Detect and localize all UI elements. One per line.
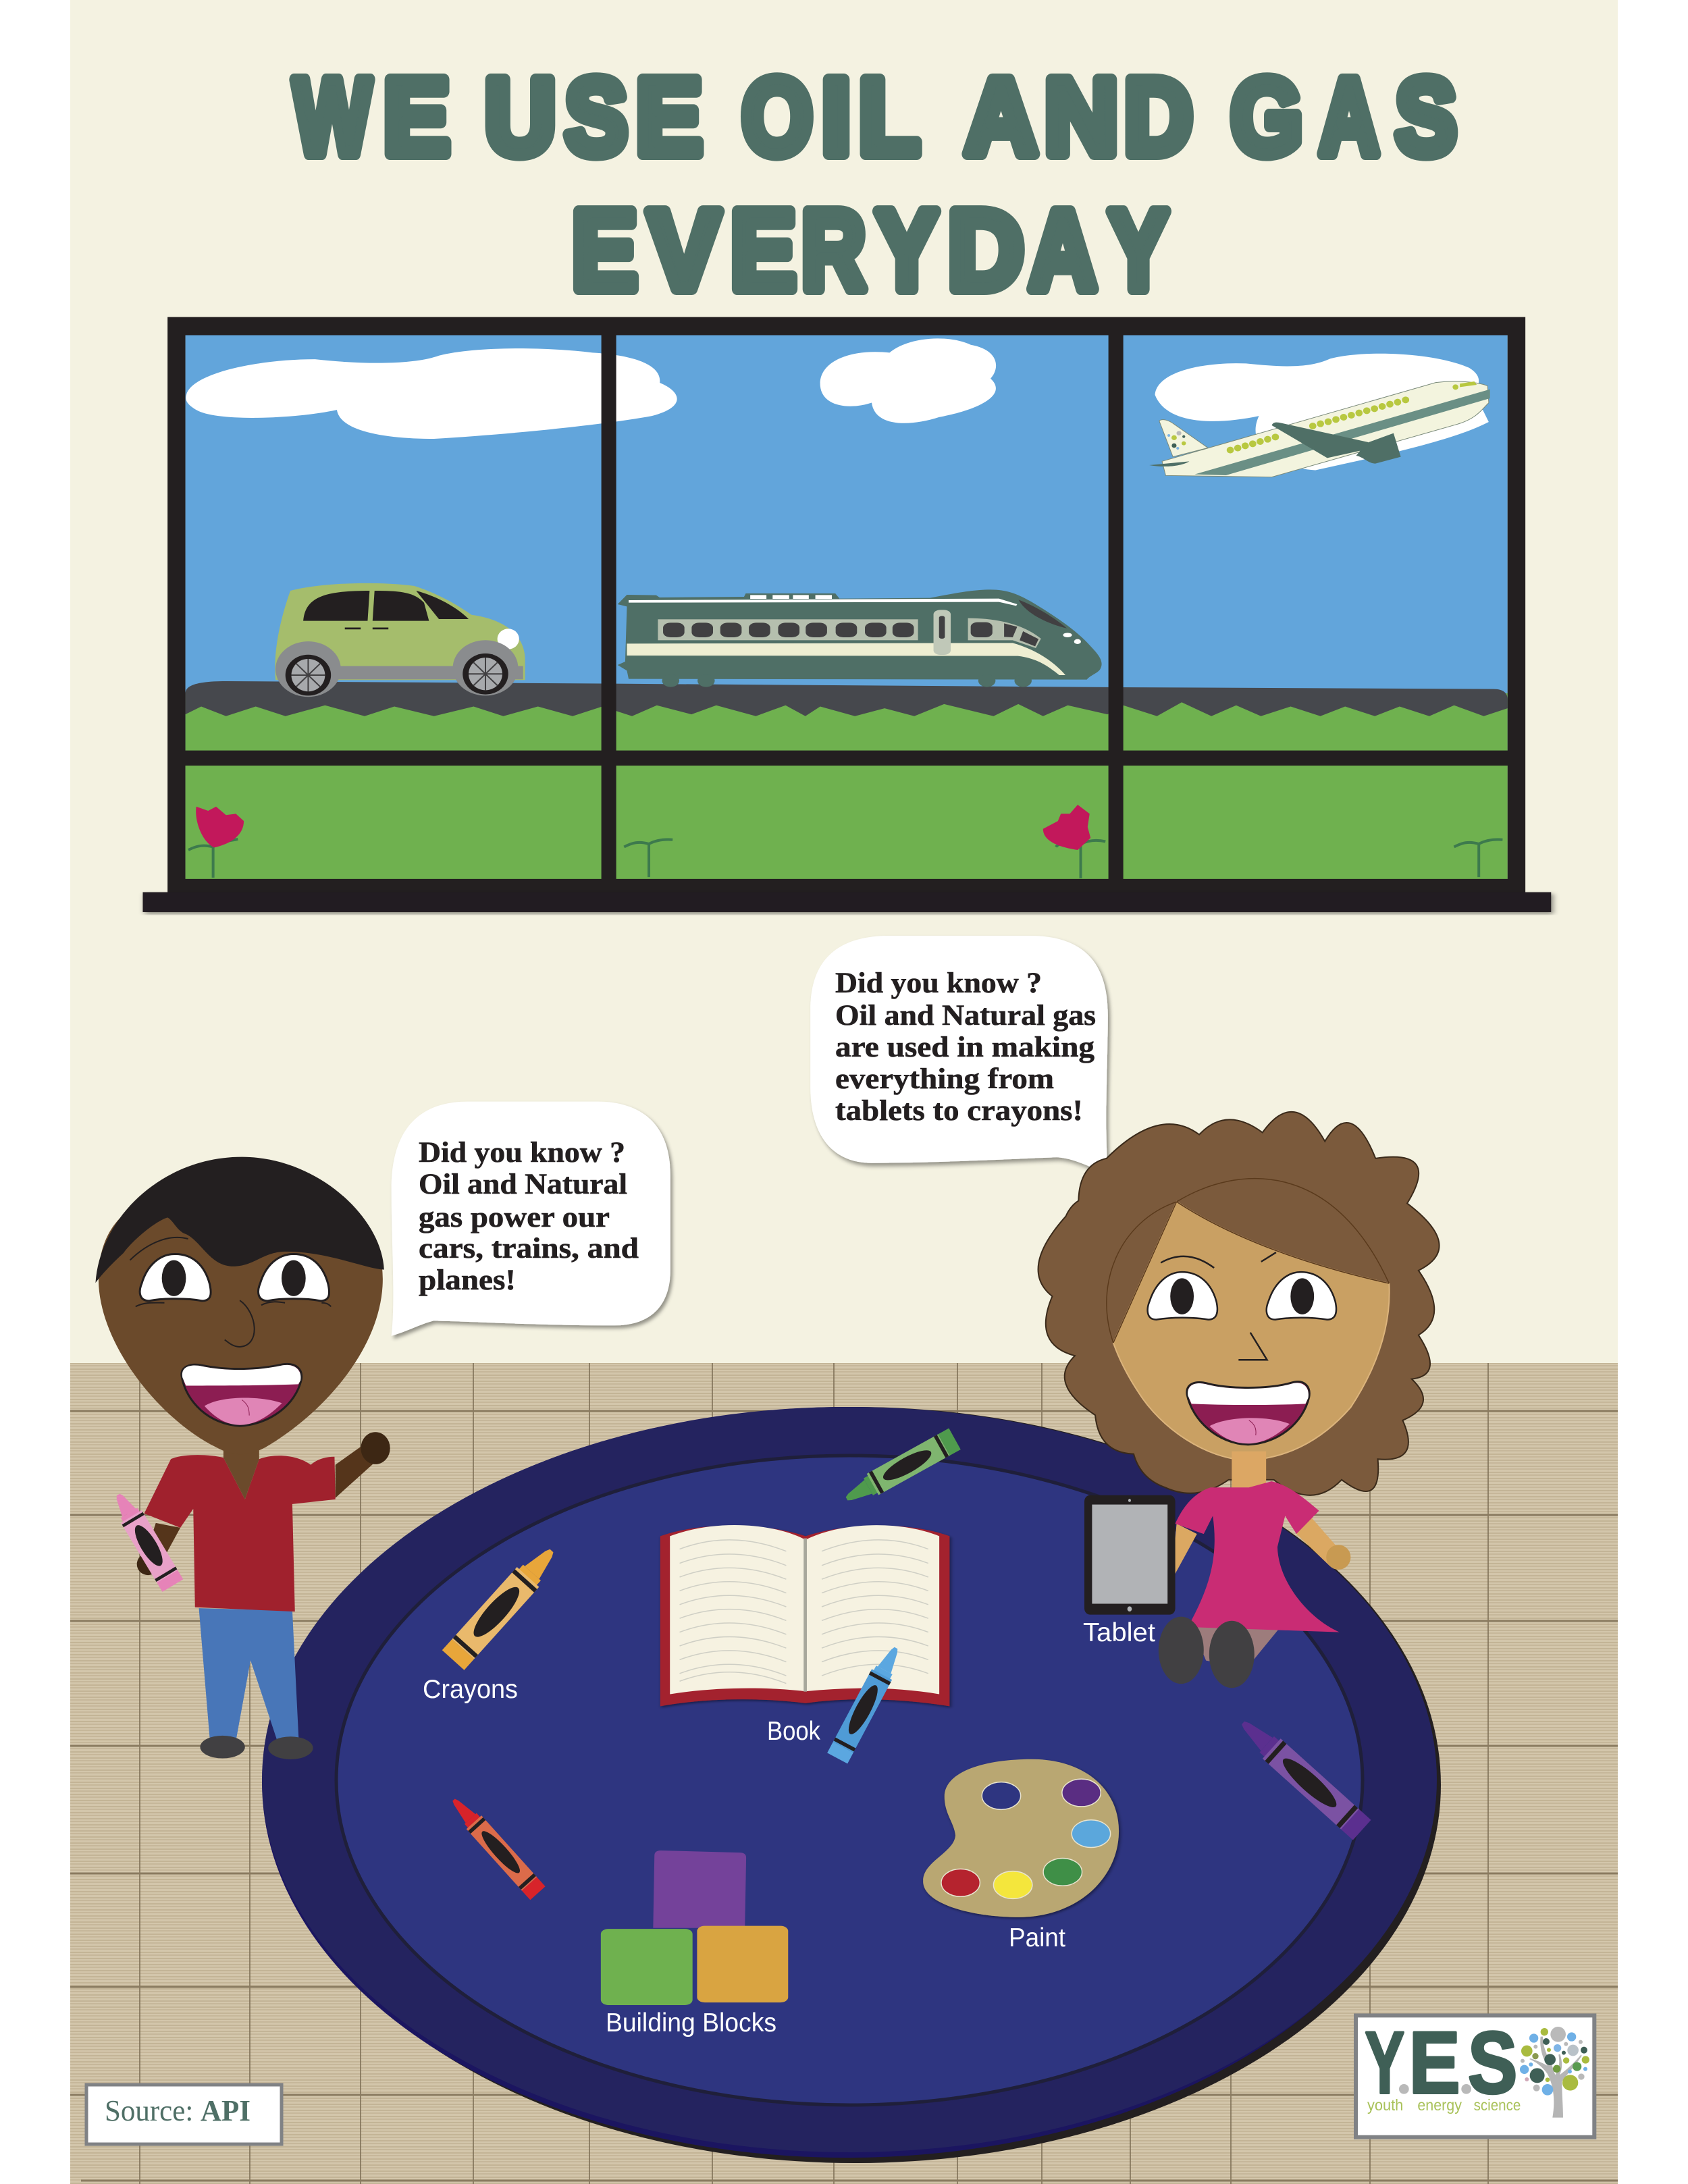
trousers xyxy=(199,1608,298,1741)
window scene xyxy=(142,317,1551,912)
window sill xyxy=(142,892,1551,912)
cream wall background xyxy=(70,0,1618,1364)
shoes xyxy=(200,1736,313,1759)
speech bubble: girl: Did you know ? xyxy=(835,967,1042,999)
logo letters: E xyxy=(1409,2013,1460,2112)
book xyxy=(660,1525,949,1706)
clouds xyxy=(186,338,1489,470)
label: Tablet: Tablet xyxy=(1083,1618,1155,1647)
label: Crayons: Crayons xyxy=(423,1675,518,1704)
face xyxy=(99,1208,383,1454)
car xyxy=(275,583,525,697)
neck xyxy=(1232,1451,1266,1487)
road xyxy=(186,681,1508,716)
logo letters xyxy=(1365,2013,1517,2112)
title: A xyxy=(1029,188,1097,313)
title: W xyxy=(294,56,371,177)
hair xyxy=(95,1157,384,1283)
lower arm xyxy=(143,1523,180,1573)
hair lines xyxy=(1107,1179,1389,1343)
mouth xyxy=(182,1364,302,1426)
logo tagline xyxy=(1367,2096,1521,2114)
title: A xyxy=(1319,56,1379,177)
title: E xyxy=(572,188,637,313)
title: G xyxy=(1231,56,1302,177)
source box xyxy=(86,2085,282,2144)
title: A xyxy=(965,56,1037,177)
logo tree xyxy=(1520,2027,1589,2118)
title: E xyxy=(636,56,702,177)
speech bubble: boy xyxy=(392,1102,670,1336)
title xyxy=(294,56,1456,313)
facial lines xyxy=(130,1237,331,1347)
grass xyxy=(186,693,1508,880)
blue crayon xyxy=(827,1643,906,1763)
eyes xyxy=(1148,1272,1336,1320)
paint palette xyxy=(923,1759,1119,1917)
sky xyxy=(186,335,1508,757)
title: V xyxy=(648,188,720,313)
airplane xyxy=(1149,381,1490,477)
label: Building Blocks: Building Blocks xyxy=(606,2008,776,2037)
train xyxy=(618,589,1102,687)
title: U xyxy=(485,56,556,177)
title: E xyxy=(384,56,450,177)
shirt xyxy=(144,1455,336,1612)
purple crayon xyxy=(1234,1713,1371,1840)
label: Book: Book xyxy=(767,1717,820,1746)
raised arm xyxy=(336,1444,378,1498)
speech bubble: girl: everything from xyxy=(835,1063,1054,1095)
pink crayon xyxy=(108,1489,183,1592)
orange crayon xyxy=(442,1541,562,1670)
title: L xyxy=(859,56,920,177)
tablet xyxy=(1084,1495,1176,1615)
logo tagline: energy xyxy=(1417,2096,1462,2114)
hair back xyxy=(1038,1112,1440,1495)
title: D xyxy=(948,188,1024,313)
title: E xyxy=(731,188,796,313)
title: S xyxy=(565,56,627,177)
YES logo xyxy=(1356,2013,1594,2137)
boy character xyxy=(95,1157,390,1759)
speech bubble: girl: are used in making xyxy=(835,1032,1095,1063)
arms xyxy=(1174,1516,1350,1575)
face xyxy=(1113,1202,1390,1460)
brows and nose xyxy=(1161,1252,1276,1360)
title: S xyxy=(1396,56,1456,177)
source box: Source: API xyxy=(105,2094,250,2127)
green crayon xyxy=(841,1429,961,1510)
building blocks xyxy=(601,1850,788,2005)
logo tagline: science xyxy=(1474,2096,1521,2114)
title: I xyxy=(822,56,851,177)
logo tagline: youth xyxy=(1367,2096,1403,2114)
speech bubble: boy: cars, trains, and xyxy=(419,1233,639,1264)
red crayon xyxy=(446,1793,546,1900)
tiled floor xyxy=(70,1363,1618,2184)
speech bubble: girl xyxy=(810,936,1108,1173)
rug xyxy=(262,1407,1441,2163)
speech bubble: boy: gas power our xyxy=(419,1202,610,1233)
mouth xyxy=(1187,1382,1309,1445)
title: D xyxy=(1124,56,1192,177)
speech bubble: boy: Did you know ? xyxy=(419,1137,625,1169)
neck xyxy=(223,1445,259,1499)
label: Paint: Paint xyxy=(1009,1923,1065,1952)
speech bubble: girl: tablets to crayons! xyxy=(835,1095,1083,1127)
title: Y xyxy=(876,188,938,313)
title: R xyxy=(801,188,866,313)
title: Y xyxy=(1109,188,1168,313)
title: N xyxy=(1045,56,1118,177)
eyes xyxy=(140,1254,329,1301)
window frame xyxy=(167,317,1525,898)
title: O xyxy=(742,56,812,177)
logo letters: Y xyxy=(1365,2013,1404,2112)
speech bubble: boy: Oil and Natural xyxy=(419,1169,627,1200)
shoes xyxy=(1159,1617,1255,1688)
speech bubble: boy: planes! xyxy=(419,1264,516,1296)
flowers and sprouts xyxy=(188,805,1502,878)
dress xyxy=(1176,1481,1340,1632)
logo letters: S xyxy=(1468,2013,1517,2112)
legs xyxy=(1192,1627,1278,1668)
speech bubble: girl: Oil and Natural gas xyxy=(835,1000,1096,1032)
girl character xyxy=(1038,1112,1440,1688)
